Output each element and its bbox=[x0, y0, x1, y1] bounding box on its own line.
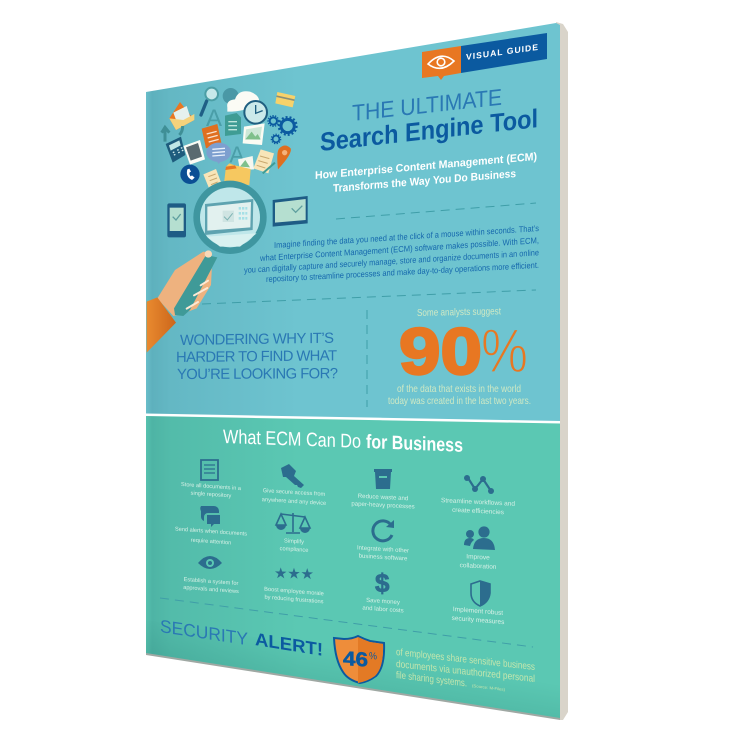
item: secure access: anywhere and any device bbox=[262, 497, 326, 507]
icon: small photo bbox=[238, 156, 254, 170]
statistic: 90 percent: % bbox=[481, 317, 528, 386]
icon: left tablet bbox=[167, 203, 186, 237]
icon: envelope bbox=[169, 102, 194, 130]
cover left spine shading bbox=[146, 66, 300, 677]
subtitle: Transforms the Way You Do Business bbox=[333, 168, 516, 195]
icon: tablet bbox=[183, 140, 205, 165]
item: reduce waste: paper-heavy processes bbox=[351, 500, 415, 511]
icon: clock bbox=[244, 101, 267, 124]
item: collaboration: Improve bbox=[466, 553, 490, 562]
badge orange eye tab bbox=[422, 46, 461, 80]
statistic: 90 percent: today was created in the last two years. bbox=[388, 396, 531, 407]
badge blue band bbox=[461, 33, 547, 73]
item: security measures: Implement robust bbox=[453, 606, 503, 617]
item: save money bbox=[362, 568, 404, 614]
item: secure access: Give secure access from bbox=[263, 488, 326, 498]
icon: speech bubble bbox=[206, 143, 231, 164]
icon: calculator bbox=[166, 137, 185, 163]
item: boost morale: ★★★ bbox=[274, 565, 314, 583]
heading: what ECM can do: for Business bbox=[366, 431, 463, 457]
illustration: documents and magnifier bbox=[147, 88, 308, 353]
icon: right monitor bbox=[273, 196, 308, 227]
text: employees statistic: file sharing systems. bbox=[396, 670, 467, 690]
item: compliance bbox=[276, 513, 310, 554]
icon: letter A: A bbox=[206, 105, 222, 132]
icon: cloud bbox=[227, 91, 259, 112]
subtitle bbox=[315, 151, 537, 195]
intro paragraph: Imagine finding the data you need at the click of a mouse within seconds. That’s bbox=[274, 223, 539, 250]
item: send alerts bbox=[175, 506, 247, 546]
icon: orange document bbox=[202, 124, 221, 148]
title: Search Engine Tool bbox=[320, 103, 538, 157]
badge: 46 percent shield: % bbox=[369, 651, 377, 662]
heading: security alert: SECURITY bbox=[160, 616, 248, 649]
intro paragraph: what Enterprise Content Management (ECM) software makes possible. With ECM, bbox=[259, 235, 539, 263]
intro paragraph bbox=[244, 223, 539, 284]
heading: security alert: ALERT! bbox=[255, 629, 323, 660]
statistic: 90 percent bbox=[388, 306, 531, 407]
item: send alerts: require attention bbox=[191, 538, 231, 546]
item: save money: Save money bbox=[366, 597, 401, 606]
item: save money: $ bbox=[375, 568, 390, 598]
item: collaboration bbox=[460, 526, 497, 571]
text: employees statistic: (Source: M-Files) bbox=[472, 683, 506, 692]
statistic: 90 percent: 90 bbox=[399, 314, 482, 388]
item: boost morale: Boost employee morale bbox=[264, 587, 324, 597]
item: integrate: business software bbox=[359, 553, 408, 562]
icon: notes page bbox=[253, 149, 275, 173]
heading: what ECM can do bbox=[223, 426, 463, 457]
statistic: 90 percent: Some analysts suggest bbox=[417, 306, 501, 319]
hand bbox=[157, 250, 217, 316]
item: establish system: approvals and reviews bbox=[183, 585, 239, 595]
item: establish system bbox=[183, 556, 239, 595]
item: collaboration: collaboration bbox=[460, 562, 497, 571]
heading: wondering: HARDER TO FIND WHAT bbox=[176, 348, 337, 366]
item: establish system: Establish a system for bbox=[184, 577, 238, 587]
icon: teal document bbox=[225, 113, 241, 136]
item: store documents: single repository bbox=[191, 491, 232, 499]
statistic: 90 percent: of the data that exists in the world bbox=[397, 384, 521, 395]
text: employees statistic bbox=[396, 647, 535, 692]
white divider bbox=[146, 414, 560, 424]
item: streamline workflows: Streamline workflows and bbox=[441, 497, 515, 508]
large magnifier lens bbox=[193, 181, 267, 254]
badge: 46 percent shield bbox=[334, 636, 384, 683]
item: reduce waste: Reduce waste and bbox=[358, 493, 408, 502]
item: streamline workflows: create efficiencies bbox=[452, 507, 505, 516]
icon: folder bbox=[224, 163, 251, 185]
item: security measures bbox=[452, 581, 505, 626]
icon: sync arrows bbox=[162, 126, 183, 142]
item: save money: and labor costs bbox=[362, 605, 404, 614]
icon: eye bbox=[428, 56, 454, 68]
heading: wondering: YOU’RE LOOKING FOR? bbox=[177, 366, 338, 383]
cover bottom shading bbox=[146, 620, 560, 718]
icon: cream document bbox=[203, 169, 222, 191]
icon: credit card bbox=[275, 92, 295, 107]
text: employees statistic: documents via unauthorized personal bbox=[396, 659, 535, 685]
item: integrate bbox=[357, 520, 409, 562]
icon: phone bbox=[180, 165, 200, 184]
item: boost morale bbox=[264, 565, 324, 605]
icon: small magnifier bbox=[201, 88, 218, 115]
book page edge bbox=[146, 22, 568, 720]
title: THE ULTIMATE bbox=[352, 84, 502, 126]
item: integrate: Integrate with other bbox=[357, 544, 409, 555]
text: employees statistic: of employees share sensitive business bbox=[396, 647, 535, 673]
item: compliance: Simplify bbox=[284, 538, 304, 546]
heading: what ECM can do: What ECM Can Do bbox=[223, 426, 361, 453]
intro paragraph: you can digitally capture and securely manage, store and organize documents in an online bbox=[244, 247, 539, 275]
badge: visual guide bbox=[422, 33, 547, 80]
heading: security alert bbox=[160, 616, 323, 660]
icon: location pin bbox=[277, 145, 291, 169]
icon: photo bbox=[243, 123, 265, 145]
item: store documents bbox=[181, 460, 242, 499]
item: reduce waste bbox=[351, 469, 415, 511]
item: store documents: Store all documents in a bbox=[181, 482, 242, 492]
subtitle: How Enterprise Content Management (ECM) bbox=[315, 151, 537, 182]
item: streamline workflows bbox=[441, 475, 515, 516]
icon: gears bbox=[268, 116, 297, 144]
heading: wondering bbox=[176, 331, 338, 383]
heading: wondering: WONDERING WHY IT’S bbox=[180, 331, 334, 349]
sleeve cuff bbox=[147, 297, 176, 353]
icon: chart circle bbox=[223, 88, 239, 104]
item: compliance: compliance bbox=[280, 546, 308, 554]
item: boost morale: by reducing frustrations bbox=[264, 595, 324, 605]
intro paragraph: repository to streamline processes and make day-to-day operations more efficient. bbox=[266, 260, 539, 284]
item: send alerts: Send alerts when documents bbox=[175, 526, 247, 538]
item: security measures: security measures bbox=[452, 615, 505, 626]
badge: 46 percent shield: 46 bbox=[343, 648, 368, 671]
panel: blue cover top bbox=[146, 23, 560, 422]
badge text: VISUAL GUIDE bbox=[466, 42, 538, 62]
icon: letter A second: A bbox=[229, 142, 245, 168]
item: secure access bbox=[262, 464, 326, 507]
panel: green cover bottom bbox=[146, 415, 560, 718]
